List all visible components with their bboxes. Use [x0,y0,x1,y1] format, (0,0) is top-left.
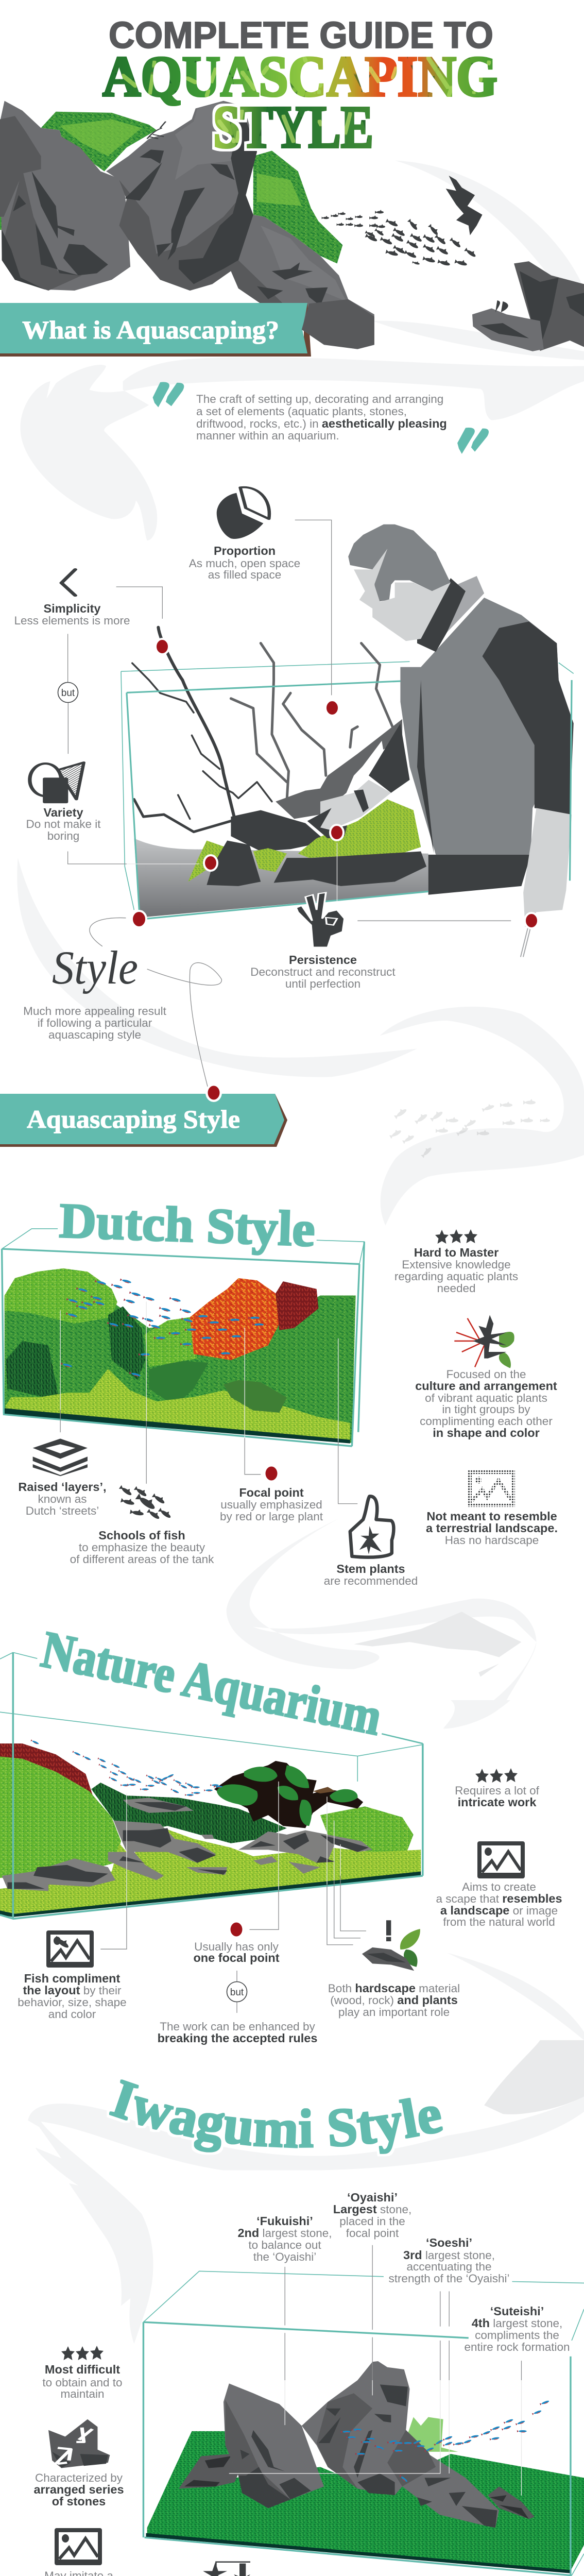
icon: pie chart [217,487,269,539]
item: variety: Do not make it [26,818,101,831]
quote: what is aquascaping: driftwood, rocks, etc.) in aesthetically pleasing [196,417,447,430]
item: proportion: as filled space [208,568,281,581]
red markers intro [132,639,538,928]
item: persistence: Deconstruct and reconstruct [250,965,396,978]
title: AQUASCAPING [102,45,497,109]
item: natural landscape [27,2528,130,2576]
red plant [190,1278,279,1360]
label: suteishi [464,2304,570,2353]
red marker [266,1466,277,1481]
item: low growing plants [164,2562,274,2576]
item: focal point: usually emphasized [220,1498,322,1511]
item: fish compliment [18,1930,127,2021]
item: stem plants [324,1496,418,1587]
item: persistence [250,892,396,990]
label: oyaishi: ‘Oyaishi’ [347,2191,398,2204]
item: fish compliment: behavior, size, shape [18,1996,127,2009]
title word: style: STYLE [213,93,373,161]
item: hardscape and plants: (wood, rock) and plants [330,1993,458,2007]
item: schools of fish [70,1484,214,1566]
substrate [134,838,428,918]
large left rock [224,2383,324,2508]
item: simplicity: Simplicity [43,602,101,615]
item: resembles a landscape: a landscape or image [440,1904,558,1917]
item: one focal point: Usually has only [194,1940,279,1953]
section ribbon: what is aquascaping [0,303,311,357]
tank front edges [0,1652,423,1919]
but marker [58,682,78,703]
neon fish: nature [30,1739,222,1796]
tank: iwagumi [143,2271,584,2575]
item: hard to master: Extensive knowledge [402,1258,511,1271]
icon: opening quote [153,382,184,407]
connectors intro [68,520,511,1100]
label: fukuishi [237,2214,332,2263]
item: intricate work: intricate work [458,1795,537,1809]
icon: picture [55,2528,102,2565]
title: COMPLETE GUIDE TO [109,15,493,56]
item: culture and arrangement: culture and arrangement [415,1379,557,1393]
item: resembles a landscape: from the natural world [443,1916,555,1928]
light mound [0,1756,121,1878]
item: schools of fish: of different areas of the tank [70,1553,214,1566]
item: variety: boring [47,829,79,842]
label: soeshi: strength of the ‘Oyaishi’ [388,2272,510,2285]
plants in tank [188,799,421,882]
item: stem plants: are recommended [324,1574,418,1587]
item: raised layers: Dutch ‘streets’ [26,1504,99,1517]
item: style [23,941,167,1041]
item: arranged stones: arranged series [33,2483,124,2496]
item: hardscape and plants: play an important role [338,2006,450,2019]
icon: three stars [61,2346,104,2360]
yellow green carpet [0,1828,421,1914]
item: style: Much more appealing result [23,1005,167,1018]
tank front edges [127,680,572,919]
item: not a terrestrial landscape [426,1470,558,1547]
light mound [5,1268,117,1324]
item: culture and arrangement: Focused on the [446,1368,526,1381]
item: arranged stones [33,2419,124,2508]
quote: what is aquascaping: manner within an aquarium. [196,429,339,442]
icon: fish school [119,1484,173,1520]
right rocks [472,261,584,351]
item: schools of fish: to emphasize the beauty [79,1541,205,1554]
icon: three stars [475,1768,518,1783]
item: resembles a landscape: Aims to create [462,1880,536,1893]
label: fukuishi: to balance out [248,2239,321,2251]
item: hardscape and plants [328,1920,460,2019]
item: hardscape and plants: Both hardscape material [328,1981,460,1995]
item: persistence: Persistence [289,953,357,967]
icon: thumb up with plant [350,1496,393,1557]
main tank with man [121,524,574,957]
item: most difficult: Most difficult [45,2363,120,2376]
label: suteishi: compliments the [475,2329,559,2342]
tank: nature aquarium [0,1652,423,1919]
background fish [388,1099,550,1158]
middle rock [106,101,374,349]
icon: rock with arrows [48,2419,110,2468]
left rock [0,101,130,291]
item: not a terrestrial landscape: Has no hardscape [445,1534,539,1547]
item: culture and arrangement: of vibrant aquatic plants [425,1392,547,1404]
back edges [143,2271,584,2575]
item: resembles a landscape [436,1841,562,1928]
right small rock [488,2486,535,2519]
tank: dutch [2,1229,364,1446]
red moss arc [0,1743,93,1797]
neon fish: dutch [61,1278,264,1377]
label: oyaishi: focal point [346,2227,399,2240]
item: one focal point: one focal point [193,1951,280,1964]
bottom dark band [5,1408,350,1444]
item: style: Style [52,941,138,994]
item: focal point: Focal point [239,1486,304,1499]
neon fish: iwagumi [341,2400,549,2483]
label: fukuishi: 2nd largest stone, [237,2226,332,2240]
item: simplicity [14,569,130,627]
item: intricate work: Requires a lot of [455,1784,540,1797]
back edges [0,1652,423,1782]
rocks in tank [207,840,426,886]
oyaishi rock [302,2361,499,2528]
item: raised layers [18,1438,107,1517]
item: not a terrestrial landscape: Not meant to resemble [426,1510,557,1523]
rocks and plants hero [0,101,584,351]
label: soeshi: 3rd largest stone, [403,2248,495,2262]
icon: picture with fish [46,1930,94,1968]
item: most difficult [42,2346,123,2400]
label: oyaishi: Largest stone, [333,2202,411,2216]
item: schools of fish: Schools of fish [98,1529,185,1542]
man [307,524,574,957]
section ribbon: aquascaping style: Aquascaping Style [27,1105,240,1133]
icon: layers [33,1438,88,1476]
dark grass [91,1783,287,1843]
item: resembles a landscape: a scape that resembles [436,1892,562,1905]
light green mid [145,1317,197,1367]
item: proportion: Proportion [214,544,276,557]
but marker: but [61,688,75,699]
item: breaking the rules: The work can be enhanced by [160,2020,315,2033]
tank back edges [2,1229,364,1264]
quote: what is aquascaping: The craft of setting up, decorating and arranging [196,393,443,405]
quote: what is aquascaping: a set of elements (aquatic plants, stones, [196,405,407,418]
tank front edges [2,1242,364,1446]
item: culture and arrangement: in tight groups by [442,1403,530,1416]
section ribbon: aquascaping style [0,1083,287,1147]
red marker [231,1923,242,1936]
bed of plants [5,1291,356,1443]
small left rock [179,2454,238,2488]
grass tuft [406,2417,458,2452]
dark grass [6,1307,145,1402]
dark band [146,2533,570,2573]
item: variety: Variety [43,806,83,819]
item: breaking the rules: breaking the accepted rules [158,2031,317,2045]
iwagumi title: Iwagumi Style [107,2079,443,2157]
item: not a terrestrial landscape: a terrestrial landscape. [426,1521,558,1535]
icon: picture [477,1841,525,1878]
right bush [320,1806,414,1854]
label: soeshi: accentuating the [406,2260,492,2273]
item: intricate work [455,1768,540,1809]
icon: faded picture [468,1470,515,1507]
item: proportion [189,487,300,581]
yellow green foreground [6,1369,350,1443]
icon: three stars [435,1229,477,1244]
moss on wood [217,1765,358,1826]
but marker: but [230,1987,244,1998]
item: most difficult: to obtain and to [42,2376,123,2389]
item: culture and arrangement: in shape and color [433,1426,540,1439]
item: focal point: by red or large plant [220,1510,323,1523]
item: simplicity: Less elements is more [14,614,130,627]
icon: mixed plant [454,1315,514,1368]
icon: angelfish pair [446,176,483,235]
item: culture and arrangement [415,1315,557,1439]
item: fish compliment: Fish compliment [24,1972,121,1985]
label: soeshi: ‘Soeshi’ [426,2236,472,2249]
item: arranged stones: of stones [52,2495,106,2508]
item: most difficult: maintain [60,2387,105,2400]
bottom band [0,1872,421,1917]
item: hard to master: Hard to Master [414,1246,499,1259]
connectors nature [100,1782,366,1949]
item: hard to master: regarding aquatic plants [394,1270,518,1283]
broadleaf plant [224,1380,287,1413]
item: persistence: until perfection [285,977,360,990]
nature aquarium title: Nature Aquarium [37,1620,386,1747]
quote: what is aquascaping [153,382,489,454]
label: fukuishi: the ‘Oyaishi’ [253,2250,316,2263]
item: culture and arrangement: complimenting each other [420,1415,553,1428]
driftwood back [231,643,402,819]
item: one focal point [193,1923,280,1964]
icon: closing quote [457,428,489,454]
plants behind rocks [0,112,342,263]
title [102,15,497,109]
item: style: if following a particular [38,1016,152,1029]
item: raised layers: known as [38,1493,87,1505]
label: soeshi [388,2236,510,2285]
label: oyaishi [333,2191,411,2240]
item: variety [26,762,101,842]
label: oyaishi: placed in the [339,2215,405,2228]
label: fukuishi: ‘Fukuishi’ [256,2214,313,2228]
tank back edges [121,662,574,910]
rocks [2,1798,372,1891]
label: suteishi: 4th largest stone, [472,2316,562,2330]
driftwood front [132,628,332,852]
but marker [227,1971,247,2013]
icon: plant with down arrow [199,2562,250,2576]
icon: variety shapes [30,762,84,803]
fish school hero [322,210,477,266]
item: stem plants: Stem plants [336,1562,405,1575]
item: focal point [220,1466,323,1523]
connectors iwagumi [229,2245,521,2496]
green carpet [147,2431,584,2572]
item: breaking the rules [158,2020,317,2045]
item: style: aquascaping style [48,1028,141,1041]
item: raised layers: Raised ‘layers’, [18,1480,107,1494]
icon: rock leaf exclamation [362,1920,420,1971]
item: arranged stones: Characterized by [35,2471,123,2484]
item: hard to master [394,1229,518,1295]
icon: ok hand [296,892,345,947]
item: fish compliment: the layout by their [23,1984,122,1997]
shrimp [147,122,166,139]
tank front edges [143,2322,572,2575]
item: proportion: As much, open space [189,557,300,570]
connectors dutch [60,1301,357,1504]
label: suteishi: ‘Suteishi’ [490,2304,544,2318]
dutch style title: Dutch Style [58,1193,316,1257]
item: hard to master: needed [437,1282,476,1295]
rock piece over ribbon edge [302,299,374,349]
label: suteishi: entire rock formation [464,2341,570,2353]
item: fish compliment: and color [48,2008,96,2021]
driftwood [214,1761,363,1828]
icon: less-than [61,569,75,596]
section ribbon: what is aquascaping: What is Aquascaping? [22,315,279,344]
